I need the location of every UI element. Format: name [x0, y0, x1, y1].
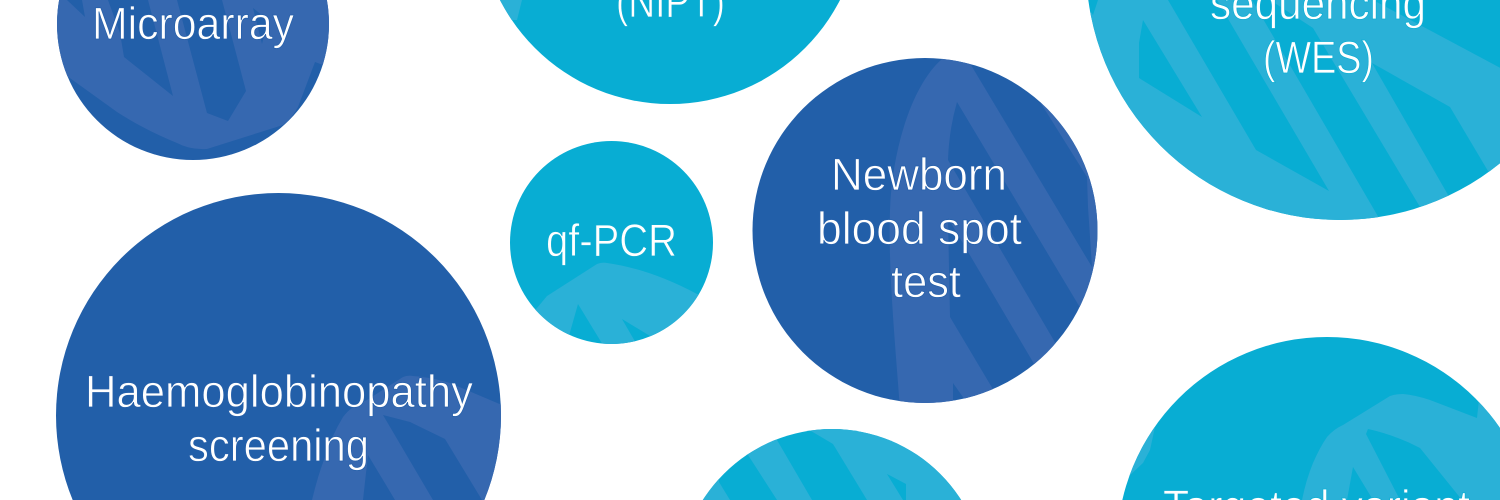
- panel: qf-PCR bubble: [510, 141, 713, 344]
- label: sequencing (WES): (WES): [1263, 32, 1374, 83]
- label: Newborn blood spot test: blood spot: [817, 203, 1022, 254]
- icon: DNA helix watermark: [890, 58, 1098, 403]
- label: Haemoglobinopathy screening: Haemoglobinopathy: [85, 366, 473, 417]
- icon: DNA helix watermark: [312, 376, 520, 500]
- icon: DNA helix watermark: [50, 0, 340, 149]
- circle: qf-PCR: [510, 141, 713, 344]
- circle: Microarray: [57, 0, 329, 160]
- icon: DNA helix watermark: [1302, 390, 1500, 500]
- icon: DNA helix watermark: [1090, 0, 1500, 220]
- panel: Microarray bubble: [50, 0, 340, 160]
- label: qf-PCR: qf-PCR: [546, 215, 677, 266]
- icon: DNA helix watermark fragment: [1129, 427, 1155, 476]
- panel: NIPT bubble: [500, 0, 840, 104]
- circle: Haemoglobinopathy screening: [56, 193, 501, 500]
- label: Haemoglobinopathy screening: screening: [188, 420, 369, 471]
- label: Newborn blood spot test: Newborn: [831, 149, 1007, 200]
- icon: DNA helix watermark: [535, 262, 699, 344]
- label: Newborn blood spot test: test: [891, 256, 961, 307]
- panel: Whole exome sequencing bubble: [1088, 0, 1500, 220]
- panel: Newborn blood spot test bubble: [752, 58, 1098, 403]
- panel: Targeted variant bubble: [1100, 337, 1500, 500]
- panel: Haemoglobinopathy screening bubble: [56, 193, 520, 500]
- circle: Newborn blood spot test: [752, 58, 1098, 403]
- panel: bottom centre bubble: [702, 429, 962, 500]
- circle: NIPT: [479, 0, 861, 104]
- icon: DNA helix watermark: [702, 429, 962, 500]
- label: sequencing (WES): [1210, 0, 1426, 83]
- label: Newborn blood spot test: [817, 149, 1022, 307]
- circle: WES: [1086, 0, 1500, 220]
- circle: Targeted variant: [1117, 337, 1500, 500]
- icon: DNA helix watermark: [500, 0, 522, 20]
- label: Haemoglobinopathy screening: [85, 366, 473, 471]
- circle: bottom centre: [679, 429, 985, 500]
